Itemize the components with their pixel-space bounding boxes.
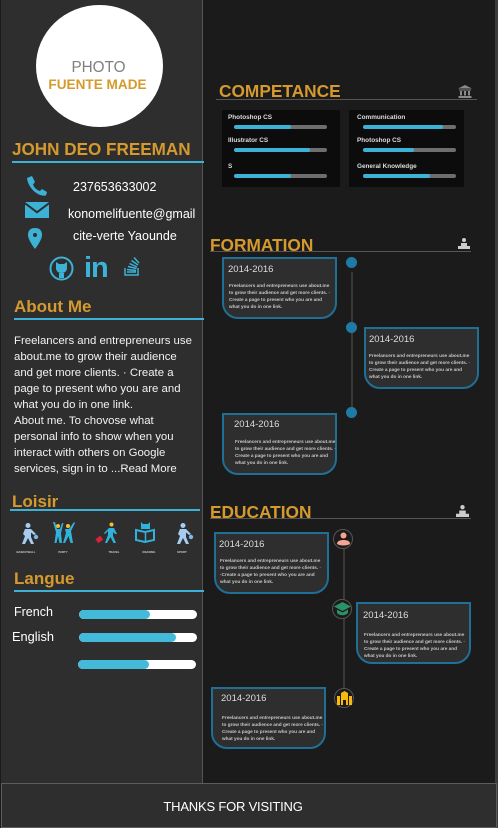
about heading: About Me: [14, 297, 91, 316]
about text: what you do in one link.: [14, 399, 133, 411]
language heading: Langue: [14, 569, 74, 588]
card: education 1: [214, 532, 329, 594]
card: formation 1: Create a page to present who you are and: [229, 297, 322, 302]
about text: Freelancers and entrepreneurs use: [14, 335, 192, 347]
card: education 2: Freelancers and entrepreneurs use about.me: [364, 632, 464, 637]
icon: sport: [177, 523, 194, 544]
skill: Illustrator: Illustrator CS: [228, 137, 268, 144]
formation heading: FORMATION: [210, 235, 313, 255]
icon: mail: [25, 202, 49, 218]
skill: Communication: Communication: [357, 114, 405, 121]
language: English: English: [12, 629, 54, 644]
language: French: French: [14, 605, 53, 619]
hobbies icons: TRAVEL: [108, 550, 119, 554]
card: education 2: 2014-2016: [363, 610, 408, 621]
card: education 3: what you do in one link.: [222, 736, 275, 741]
skill: Photoshop: Photoshop CS: [357, 137, 401, 144]
card: education 2: to grow their audience and get more clients. ·: [364, 639, 465, 644]
about text: page to present who you are and: [14, 383, 181, 395]
icon: github: [50, 256, 74, 280]
card: education 3: to grow their audience and get more clients. ·: [222, 722, 323, 727]
card: education 3: Freelancers and entrepreneurs use about.me: [222, 715, 322, 720]
card: education 3: [211, 687, 326, 749]
timeline line: [351, 272, 353, 410]
card: formation 1: what you do in one link.: [229, 304, 282, 309]
hobbies icons: READING: [143, 550, 155, 554]
footer: [1, 783, 497, 828]
panel: sidebar: [1, 0, 203, 783]
card: formation 1: Freelancers and entrepreneurs use about.me: [229, 283, 329, 288]
name heading: JOHN DEO FREEMAN: [12, 140, 191, 159]
hobbies icons: SPORT: [177, 550, 187, 554]
card: education 3: Create a page to present who you are and: [222, 729, 315, 734]
about text: services, sign in to ...Read More: [14, 463, 177, 475]
card: formation 1: [222, 257, 337, 319]
card: formation 3: Freelancers and entrepreneurs use about.me: [235, 439, 335, 444]
right edge: [495, 0, 498, 828]
card: formation 2: what you do in one link.: [369, 374, 422, 379]
photo label: PHOTO: [71, 59, 126, 76]
photo circle: [36, 5, 163, 127]
card: formation 1: 2014-2016: [228, 264, 273, 275]
hobbies icons: PARTY: [58, 550, 68, 554]
card: education 3: 2014-2016: [221, 693, 266, 704]
skill: S: S: [228, 163, 232, 170]
panel: skills right: [349, 110, 464, 187]
icon: school building: [334, 688, 354, 708]
card: formation 2: Create a page to present who you are and: [369, 367, 462, 372]
icon: graduation cap: [332, 599, 352, 619]
icon: person podium: [458, 238, 470, 249]
icon: person podium: [456, 505, 469, 517]
card: education 2: [356, 602, 471, 664]
card: education 2: what you do in one link.: [364, 653, 417, 658]
about text: and get more clients. · Create a: [14, 367, 174, 379]
skill: Photoshop: Photoshop CS: [228, 114, 272, 121]
card: formation 3: what you do in one link.: [235, 460, 288, 465]
icon: teacher: [333, 529, 353, 549]
card: formation 2: Freelancers and entrepreneurs use about.me: [369, 353, 469, 358]
language: unnamed bar: [78, 660, 196, 669]
icon: location pin: [28, 228, 42, 249]
competence heading: COMPETANCE: [219, 81, 341, 101]
icon: linkedin: in: [84, 252, 108, 284]
card: formation 2: [364, 327, 479, 389]
footer text: THANKS FOR VISITING: [163, 799, 303, 814]
card: education 1: Freelancers and entrepreneurs use about.me: [220, 558, 320, 563]
card: formation 2: to grow their audience and get more clients. ·: [369, 360, 470, 365]
brand label: FUENTE MADE: [48, 77, 147, 92]
panel: skills left: [222, 110, 340, 187]
card: formation 3: to grow their audience and get more clients. ·: [235, 446, 336, 451]
icon: travel: [96, 522, 117, 544]
about text: About me. To chovose what: [14, 415, 154, 427]
icon: museum: [458, 85, 472, 98]
hobbies icons: [16, 522, 194, 554]
icon: phone: [27, 176, 47, 196]
card: education 1: what you do in one link.: [220, 579, 273, 584]
education heading: EDUCATION: [210, 502, 311, 522]
card: formation 3: [222, 413, 337, 475]
icon: stack overflow: [124, 257, 140, 276]
icon: reading: [135, 522, 155, 543]
card: formation 2: 2014-2016: [369, 334, 414, 345]
about text: [14, 335, 192, 475]
icon: party: [53, 522, 75, 543]
card: formation 3: Create a page to present who you are and: [235, 453, 328, 458]
card: formation 3: 2014-2016: [234, 419, 279, 430]
icon: basketball: [22, 523, 38, 544]
email: konomelifuente@gmail: [68, 207, 195, 221]
address: cite-verte Yaounde: [73, 229, 177, 243]
about text: personal info to show when you: [14, 431, 174, 443]
about text: interact with others on Google: [14, 447, 165, 459]
card: education 1: ·Create a page to present who you are and: [220, 572, 315, 577]
skill: General Knowledge: General Knowledge: [357, 163, 417, 170]
hobby captions: BASKETBALL: [17, 550, 35, 554]
timeline dots: [346, 257, 357, 268]
timeline line: [343, 548, 345, 688]
hobbies heading: Loisir: [12, 492, 58, 511]
card: education 1: 2014-2016: [219, 539, 264, 550]
about text: about.me to grow their audience: [14, 351, 177, 363]
card: education 1: to grow their audience and get more clients. ·: [220, 565, 321, 570]
card: formation 1: to grow their audience and get more clients. ·: [229, 290, 330, 295]
card: education 2: Create a page to present who you are and: [364, 646, 457, 651]
phone number: 237653633002: [73, 180, 156, 194]
